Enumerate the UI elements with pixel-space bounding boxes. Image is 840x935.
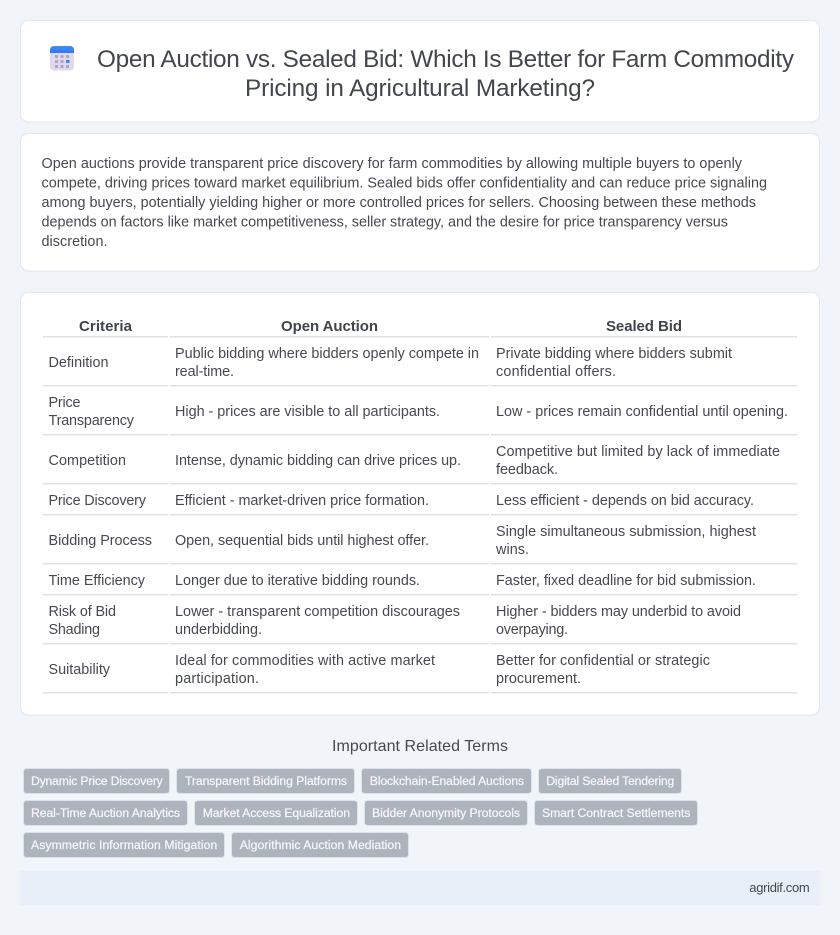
row: Definition: Private bidding where bidders submit xyxy=(496,346,732,362)
row: Price Transparency: Low - prices remain confidential until opening. xyxy=(496,404,788,420)
row: Suitability xyxy=(43,653,797,694)
row: Time Efficiency: Time Efficiency xyxy=(48,573,146,589)
row: Price Transparency: Price xyxy=(48,395,80,411)
tag: Asymmetric Information Mitigation: Asymmetric Information Mitigation xyxy=(31,838,217,852)
row: Price Discovery xyxy=(43,493,797,516)
tag: Real-Time Auction Analytics: Real-Time Auction Analytics xyxy=(31,806,180,820)
tag: Blockchain-Enabled Auctions xyxy=(362,768,532,794)
table header row: Criteria xyxy=(79,318,133,335)
row: Competition: Competitive but limited by lack of immediate xyxy=(496,444,780,460)
panel: comparison table xyxy=(20,292,820,715)
row: Definition xyxy=(43,346,797,386)
intro paragraph: discretion. xyxy=(42,234,108,250)
row: Competition xyxy=(43,444,797,484)
footer: agridif.com xyxy=(749,880,810,895)
tag: Transparent Bidding Platforms xyxy=(176,768,354,794)
row: Risk of Bid Shading: underbidding. xyxy=(175,622,262,638)
tag: Real-Time Auction Analytics xyxy=(24,800,188,826)
row: Risk of Bid Shading: Shading xyxy=(48,622,100,638)
tag: Bidder Anonymity Protocols xyxy=(364,800,528,826)
table header row: Sealed Bid xyxy=(606,318,682,335)
row: Definition: Public bidding where bidders openly compete in xyxy=(175,346,479,362)
row: Bidding Process: Open, sequential bids until highest offer. xyxy=(175,533,429,549)
row: Price Discovery: Price Discovery xyxy=(48,493,147,509)
row: Definition: confidential offers. xyxy=(496,364,616,380)
tag: Transparent Bidding Platforms: Transparent Bidding Platforms xyxy=(185,774,347,788)
title: Open Auction vs. Sealed Bid: Which Is Better for Farm Commodity xyxy=(97,46,795,73)
tag: Market Access Equalization xyxy=(194,800,358,826)
row: Risk of Bid Shading xyxy=(43,604,797,644)
tag: Algorithmic Auction Mediation: Algorithmic Auction Mediation xyxy=(240,838,401,852)
row: Price Discovery: Less efficient - depends on bid accuracy. xyxy=(496,493,754,509)
tag group: related terms xyxy=(24,768,698,858)
row: Price Transparency: Transparency xyxy=(48,413,135,429)
tag: Dynamic Price Discovery: Dynamic Price Discovery xyxy=(31,774,164,788)
intro paragraph: compete, driving prices toward market equilibrium. Sealed bids offer confidentiality and can reduce price signaling xyxy=(42,175,767,191)
tag: Market Access Equalization: Market Access Equalization xyxy=(203,806,350,820)
row: Price Discovery: Efficient - market-driven price formation. xyxy=(175,493,429,509)
footer xyxy=(20,871,820,905)
row: Suitability: Ideal for commodities with active market xyxy=(175,653,435,669)
row: Risk of Bid Shading: Risk of Bid xyxy=(48,604,116,620)
row: Suitability: procurement. xyxy=(496,671,581,687)
row: Bidding Process xyxy=(43,524,797,564)
tag: Dynamic Price Discovery xyxy=(24,768,170,794)
title: Pricing in Agricultural Marketing? xyxy=(245,75,595,102)
panel: introduction text xyxy=(20,134,820,271)
row: Competition: Intense, dynamic bidding can drive prices up. xyxy=(175,453,461,469)
row: Price Transparency xyxy=(43,395,797,436)
panel: title header xyxy=(20,20,820,122)
row: Risk of Bid Shading: Lower - transparent competition discourages xyxy=(175,604,460,620)
row: Suitability: Suitability xyxy=(48,662,111,678)
tag: Blockchain-Enabled Auctions: Blockchain-Enabled Auctions xyxy=(370,774,524,788)
table header row xyxy=(43,318,797,338)
tag: Algorithmic Auction Mediation xyxy=(232,832,408,858)
tag: Digital Sealed Tendering xyxy=(538,768,682,794)
row: Bidding Process: Single simultaneous submission, highest xyxy=(496,524,756,540)
row: Bidding Process: wins. xyxy=(495,542,529,558)
row: Time Efficiency: Faster, fixed deadline for bid submission. xyxy=(496,573,756,589)
row: Definition: Definition xyxy=(48,355,108,371)
icon: calendar xyxy=(50,46,74,70)
tag: Smart Contract Settlements: Smart Contract Settlements xyxy=(542,806,690,820)
tag: Digital Sealed Tendering: Digital Sealed Tendering xyxy=(546,774,674,788)
heading: related terms: Important Related Terms xyxy=(332,738,508,755)
row: Risk of Bid Shading: Higher - bidders may underbid to avoid xyxy=(496,604,741,620)
row: Competition: feedback. xyxy=(496,462,558,478)
title xyxy=(97,46,795,102)
row: Suitability: Better for confidential or strategic xyxy=(496,653,710,669)
row: Time Efficiency xyxy=(43,573,797,596)
row: Competition: Competition xyxy=(48,453,126,469)
tag: Asymmetric Information Mitigation xyxy=(24,832,224,858)
tag: Bidder Anonymity Protocols: Bidder Anonymity Protocols xyxy=(372,806,520,820)
table header row: Open Auction xyxy=(281,318,378,335)
row: Definition: real-time. xyxy=(175,364,234,380)
intro paragraph: depends on factors like market competitiveness, seller strategy, and the desire for price transparency versus xyxy=(42,214,728,230)
intro paragraph: Open auctions provide transparent price discovery for farm commodities by allowing multiple buyers to openly xyxy=(42,156,743,172)
tag: Smart Contract Settlements xyxy=(534,800,698,826)
row: Suitability: participation. xyxy=(175,671,259,687)
row: Price Transparency: High - prices are visible to all participants. xyxy=(175,404,440,420)
row: Time Efficiency: Longer due to iterative bidding rounds. xyxy=(175,573,420,589)
row: Bidding Process: Bidding Process xyxy=(48,533,152,549)
row: Risk of Bid Shading: overpaying. xyxy=(496,622,568,638)
intro paragraph xyxy=(42,156,767,250)
intro paragraph: among buyers, potentially yielding higher or more controlled prices for sellers. Choosing between these methods xyxy=(42,195,756,211)
